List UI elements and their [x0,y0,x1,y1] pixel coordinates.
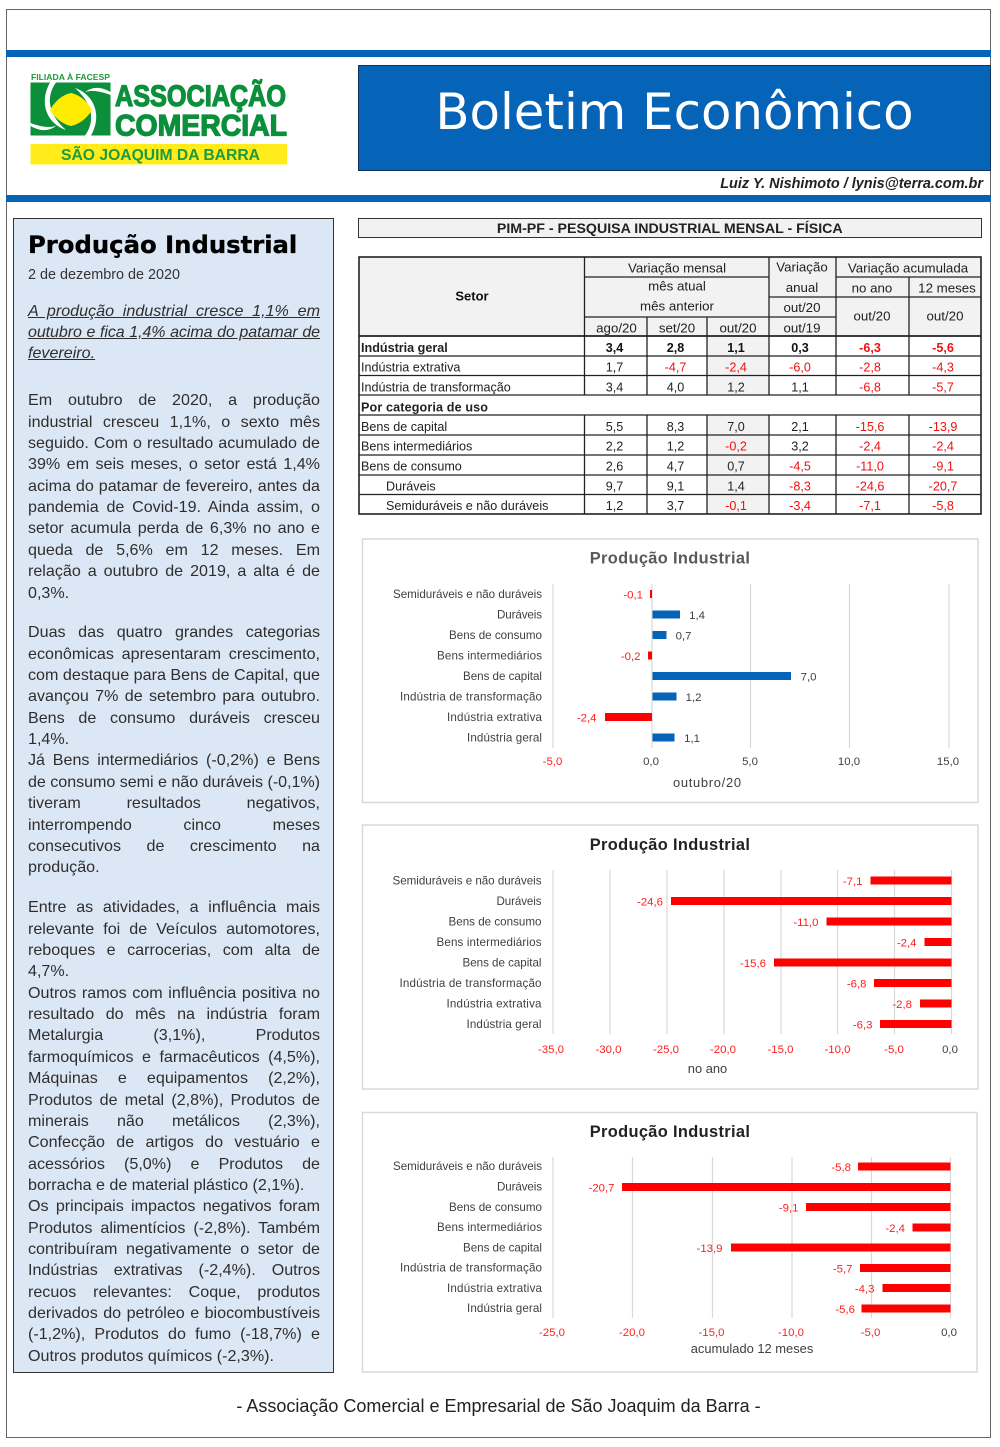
row: Semiduráveis e não duráveis: -0,1 [725,499,747,513]
category labels: Duráveis [496,895,542,908]
category labels: Semiduráveis e não duráveis [393,588,542,601]
article paragraph 1: setor acumula perda de 6,3% no ano e [28,519,320,537]
category labels: Indústria extrativa [447,711,543,724]
row: Indústria extrativa: 1,7 [606,360,623,374]
row: Bens de capital: -15,6 [856,420,884,434]
row: Semiduráveis e não duráveis: 1,2 [606,499,623,513]
row: Indústria extrativa: -6,0 [789,360,811,374]
article paragraph 3: Metalurgia (3,1%), Produtos [28,1026,320,1044]
chart: acumulado 12 meses [362,1112,978,1373]
table header labels: no ano [852,280,892,296]
row: Duráveis [386,480,957,494]
data labels: -0,1 [623,590,643,602]
axis title: no ano [688,1061,727,1076]
data labels: -5,7 [833,1264,852,1276]
value axis: -5,0 [861,1327,880,1339]
row: Indústria de transformação: 1,2 [727,380,745,394]
row: Bens de capital: Bens de capital [361,420,447,434]
logo emblem [30,82,110,136]
table header labels: Variação mensal [628,260,726,276]
row: Duráveis: Duráveis [386,480,436,494]
row: Semiduráveis e não duráveis: -5,8 [932,499,954,513]
data labels: 7,0 [801,672,816,684]
value axis [538,1044,958,1056]
row: Bens de consumo: -9,1 [932,460,954,474]
table header labels: Variação acumulada [848,260,969,276]
article paragraph 2: avançou 7% de setembro para outubro. [28,687,320,705]
row: Duráveis: 9,1 [667,480,684,494]
bars [605,590,791,742]
category labels: Bens de consumo [449,629,542,642]
category labels: Bens de capital [462,956,542,970]
category labels: Semiduráveis e não duráveis [393,1160,542,1173]
lower blue rule [6,195,991,202]
row: Indústria geral: 3,4 [606,341,623,355]
row: Bens de capital [361,420,957,434]
row: Indústria de transformação: -6,8 [859,380,881,394]
footer: - Associação Comercial e Empresarial de São Joaquim da Barra - [236,1396,761,1416]
article paragraph 1: Em outubro de 2020, a produção [28,391,320,409]
article paragraph 3: Produtos alimentícios (-2,8%). Também [28,1219,320,1237]
article paragraph 3: farmoquímicos e farmacêuticos (4,5%), [28,1048,320,1066]
article paragraph 3: derivados do petróleo e biocombustíveis [28,1304,320,1322]
article paragraph 3: Máquinas e equipamentos (2,2%), [28,1069,320,1087]
data labels: -2,4 [577,712,596,724]
logo yellow city band [30,144,287,164]
row: Indústria extrativa: -4,3 [932,360,954,374]
row: Bens de consumo: 2,6 [606,460,623,474]
article paragraph 2: 1,4%. [28,730,69,748]
table header labels: 12 meses [918,280,976,296]
row: Indústria geral [361,341,954,355]
table header labels: out/20 [784,300,820,315]
article date: 2 de dezembro de 2020 [28,267,180,283]
data labels: -13,9 [697,1243,722,1255]
category labels: Bens de consumo [449,1201,542,1214]
row: Indústria geral: 1,1 [727,341,745,355]
logo wordmark [115,79,287,142]
article paragraph 3: Outros produtos químicos (-2,3%). [28,1347,274,1365]
row: Indústria de transformação [361,380,954,394]
value axis: -20,0 [710,1044,736,1056]
category labels: Bens intermediários [437,650,542,662]
article paragraph 2: com destaque para Bens de Capital, que [28,666,320,684]
value axis: -35,0 [538,1044,564,1056]
article paragraph 3: (-1,2%), Produtos do fumo (-18,7%) e [28,1325,320,1343]
logo: Associação Comercial [30,72,287,164]
category labels: Indústria geral [466,1018,542,1031]
category labels: Duráveis [497,608,542,622]
category labels: Bens intermediários [436,936,542,949]
value axis: 5,0 [742,756,758,768]
article paragraph 3: recuos relevantes: Coque, produtos [28,1283,320,1301]
banner title text: Boletim Econômico [435,83,914,141]
row: Semiduráveis e não duráveis: -7,1 [859,499,881,513]
value axis: -10,0 [825,1044,850,1056]
value axis: 0,0 [643,756,659,768]
data labels [637,876,916,1032]
row: Bens de consumo: -11,0 [856,460,884,474]
row: Duráveis: -8,3 [789,480,811,494]
category labels: Indústria geral [467,1302,542,1315]
row: Bens intermediários [361,440,954,454]
row: Indústria geral: -6,3 [859,341,881,355]
row: Indústria geral: 0,3 [791,341,809,355]
article paragraph 2: Bens de consumo duráveis cresceu [28,709,320,727]
article paragraph 3: 4,7%. [28,962,69,980]
value axis: 15,0 [937,756,959,768]
data labels: -2,4 [885,1223,905,1235]
article paragraph 3: Confecção de artigos do vestuário e [28,1133,320,1151]
row: Por categoria de uso: Por categoria de uso [361,400,488,414]
table header labels: out/19 [784,320,820,336]
data labels: -2,4 [897,938,916,950]
row: Semiduráveis e não duráveis: -3,4 [789,499,811,513]
chart: no ano [362,824,979,1090]
row: Indústria extrativa: Indústria extrativa [361,360,460,374]
row: Bens de consumo: 4,7 [667,460,684,474]
data labels: -15,6 [740,958,766,970]
title banner [358,65,991,171]
article paragraph 1: pandemia de Covid-19. Ainda assim, o [28,498,320,516]
chart: outubro/20 [362,538,979,804]
row: Bens intermediários: 1,2 [667,440,684,454]
row: Indústria extrativa: -4,7 [665,360,686,374]
row: Indústria de transformação: 1,1 [791,380,809,394]
chart title: Produção Industrial [590,836,750,854]
data labels: -6,8 [847,978,866,990]
bars [671,876,952,1028]
article paragraph 3: Indústrias extrativas (-2,4%). Outros [28,1261,320,1279]
category labels: Indústria de transformação [400,1262,542,1274]
table header labels: Setor [455,288,489,304]
table header labels: ago/20 [596,320,637,336]
article paragraph 1: 0,3%. [28,584,69,602]
article paragraph 3: borracha e de material plástico (2,1%). [28,1176,304,1194]
article paragraph 2: tiveram resultados negativos, [28,794,320,812]
row: Indústria extrativa: -2,8 [859,360,881,374]
row: Bens intermediários: Bens intermediários [361,440,472,454]
value axis: 0,0 [942,1044,958,1056]
category labels: Indústria extrativa [446,998,542,1010]
data labels [589,1162,905,1316]
row: Indústria de transformação: 4,0 [667,380,684,394]
row: Indústria geral: Indústria geral [361,341,448,355]
category labels: Duráveis [497,1180,542,1194]
article lead: fevereiro. [28,344,95,362]
category labels: Indústria geral [467,732,542,744]
data labels [577,590,816,745]
data table [358,256,982,515]
article paragraph 2: consecutivos de crescimento na [28,837,320,855]
category labels [392,874,542,1031]
row: Indústria geral: 2,8 [667,341,684,355]
axis title: outubro/20 [673,775,741,790]
value axis: -5,0 [543,756,562,768]
table grid [359,257,981,514]
row: Indústria de transformação: -5,7 [932,380,954,394]
row: Bens intermediários: 3,2 [791,440,809,454]
data labels: -6,3 [853,1020,872,1032]
chart title: Produção Industrial [590,1123,750,1141]
data labels: 1,2 [686,692,702,704]
row: Duráveis: 9,7 [606,480,623,494]
row: Indústria extrativa: -2,4 [725,360,747,374]
article paragraph 3: Outros ramos com influência positiva no [28,984,320,1002]
chart frame [362,825,978,1089]
data labels: -20,7 [589,1182,614,1194]
row: Bens de capital: 7,0 [727,420,745,434]
article paragraph 1: acima do patamar de fevereiro, antes da [28,477,320,495]
row: Semiduráveis e não duráveis: 3,7 [667,499,684,513]
article paragraph 1: queda de 5,6% em 12 meses. Em [28,541,320,559]
data labels: -2,8 [892,999,912,1011]
data labels: 0,7 [676,630,692,642]
table header labels: out/20 [854,308,890,324]
category labels: Bens intermediários [437,1221,542,1234]
table header labels [455,260,976,336]
chart frame [362,1112,977,1372]
article paragraph 3: relevante foi de Veículos automotores, [28,920,320,938]
article heading: Produção Industrial [28,230,297,259]
row: Bens de capital: -13,9 [929,420,957,434]
value axis: -10,0 [778,1327,804,1339]
article paragraph 2 [28,623,320,876]
article paragraph 1: relação a outubro de 2019, a alta é de [28,562,320,580]
data labels: -5,8 [831,1162,851,1174]
row: Indústria de transformação: 3,4 [606,380,623,394]
row: Bens intermediários: 2,2 [606,440,623,454]
value axis [539,1327,957,1339]
value axis [543,756,959,768]
row: Duráveis: -24,6 [856,480,884,494]
row: Bens intermediários: -2,4 [859,440,881,454]
table header labels: anual [786,280,818,295]
article paragraph 3 [28,898,320,1365]
article paragraph 1: seguido. Com o resultado acumulado de [28,434,320,452]
data labels: -11,0 [793,917,818,929]
data labels: -7,1 [843,876,862,888]
logo wordmark: COMERCIAL [115,110,287,142]
category labels: Indústria de transformação [400,690,542,704]
article paragraph 3: contribuíram negativamente o setor de [28,1240,320,1258]
article paragraph 2: Duas das quatro grandes categorias [28,623,320,641]
row: Bens intermediários: -2,4 [932,440,954,454]
article paragraph 2: de consumo semi e não duráveis (-0,1%) [28,773,320,791]
article paragraph 2: Já Bens intermediários (-0,2%) e Bens [28,751,320,769]
data labels: 1,4 [689,610,705,622]
article paragraph 3: minerais não metálicos (2,3%), [28,1112,320,1130]
value axis: -15,0 [699,1327,724,1339]
row: Indústria geral: -5,6 [932,341,954,355]
row: Bens de capital: 2,1 [791,420,809,434]
data labels: -9,1 [779,1202,798,1214]
value axis: -30,0 [596,1044,621,1056]
article paragraph 2: econômicas apresentaram crescimento, [28,645,320,663]
row: Bens de consumo: -4,5 [789,460,811,474]
article paragraph 3: Produtos de metal (2,8%), Produtos de [28,1091,320,1109]
row: Indústria de transformação: Indústria de transformação [361,380,511,394]
table header labels: mês anterior [640,298,715,314]
article paragraph 1 [28,391,320,602]
article lead [27,302,320,362]
author credit: Luiz Y. Nishimoto / lynis@terra.com.br [720,176,983,192]
category labels: Indústria de transformação [400,977,542,990]
article paragraph 3: Os principais impactos negativos foram [28,1197,320,1215]
table header labels: mês atual [648,278,706,294]
value axis: -5,0 [884,1044,904,1056]
value axis: -15,0 [768,1044,793,1056]
row: Bens de consumo [361,460,954,474]
bars [622,1162,950,1312]
category labels: Bens de capital [463,670,542,683]
chart frame [362,539,978,802]
value axis: -25,0 [539,1327,565,1339]
row: Bens de consumo: Bens de consumo [361,460,462,474]
article paragraph 1: 39% em seis meses, o setor está 1,4% [28,455,320,473]
table header labels: out/20 [720,320,756,336]
value axis: -25,0 [653,1044,679,1056]
chart title: Produção Industrial [590,550,750,568]
article paragraph 3: acessórios (5,0%) e Produtos de [28,1155,320,1173]
row: Bens de capital: 8,3 [667,420,684,434]
article paragraph 3: Entre as atividades, a influência mais [28,898,320,916]
value axis: -20,0 [619,1327,645,1339]
panel: article text [13,218,334,1373]
table header labels: Variação [776,260,828,274]
row: Semiduráveis e não duráveis [386,499,954,513]
value axis: 10,0 [838,756,860,768]
data labels: 1,1 [684,733,700,745]
row: Semiduráveis e não duráveis: Semiduráveis e não duráveis [386,499,548,513]
article lead: outubro e fica 1,4% acima do patamar de [28,324,320,341]
table shaded cells [359,257,981,514]
axis title: acumulado 12 meses [691,1341,813,1356]
category labels [393,588,543,744]
data labels: -4,3 [855,1284,874,1296]
value axis: 0,0 [941,1327,957,1339]
row: Bens de capital: 5,5 [606,420,623,434]
logo yellow city band: SÃO JOAQUIM DA BARRA [61,146,260,164]
article paragraph 1: industrial cresceu 1,1%, o sexto mês [28,413,320,431]
category labels: Bens de consumo [448,916,542,928]
row: Bens de consumo: 0,7 [727,460,745,474]
table header labels: out/20 [927,308,963,324]
row: Duráveis: 1,4 [727,480,745,494]
article lead: A produção industrial cresce 1,1% em [28,302,320,320]
table heading: PIM-PF - PESQUISA INDUSTRIAL MENSAL - FÍSICA [497,220,843,236]
article paragraph 2: produção. [28,858,100,876]
table header labels: set/20 [659,320,695,336]
category labels: Semiduráveis e não duráveis [392,874,542,888]
row: Duráveis: -20,7 [929,480,957,494]
data labels: -0,2 [621,651,640,663]
logo affiliation text: FILIADA À FACESP [31,72,111,82]
table heading [358,218,982,238]
row: Indústria extrativa [361,360,954,374]
category labels [393,1160,543,1315]
article paragraph 3: reboques e carrocerias, com alta de [28,941,320,959]
top blue rule [6,50,991,57]
category labels: Bens de capital [463,1242,542,1254]
category labels: Indústria extrativa [447,1282,543,1295]
article paragraph 2: interrompendo cinco meses [28,816,320,834]
row: Bens intermediários: -0,2 [725,440,747,454]
data labels: -5,6 [835,1304,855,1316]
article paragraph 3: resultado do mês na indústria foram [28,1005,320,1023]
data labels: -24,6 [637,896,663,908]
